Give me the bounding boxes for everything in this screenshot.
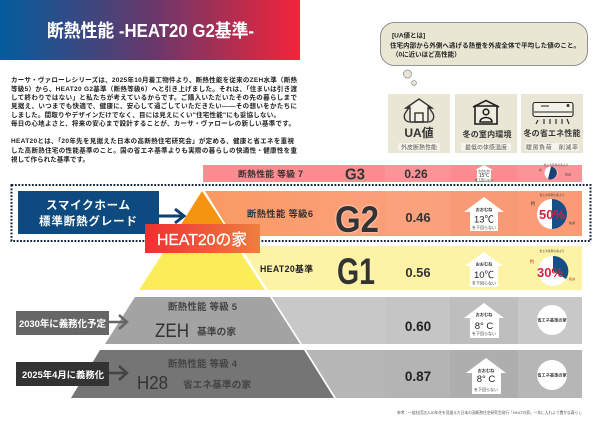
icon: house 15C: [475, 165, 493, 182]
icon: house 13C: [464, 197, 504, 231]
icon: house 13C: を下回らない: [472, 224, 496, 230]
chart: G1 reduction pie 30%: 削減: [569, 276, 575, 281]
icon: H28 energy standard circle: 省エネ基準の家: [537, 372, 567, 378]
icon: house 8C: おおむね: [476, 311, 493, 318]
intro text block: 等級5）から、HEAT20 G2基準（断熱等級6）へと引き上げました。それは、「住まいは引き渡: [11, 84, 298, 93]
row: grade 7 G3: G3: [345, 166, 365, 184]
pyramid: yellow G1 layer: [139, 253, 265, 290]
footer source note: 参考：一般社団法人20年先を見据えた日本の高断熱住宅研究会発行「HEATの家」一年に入れよう豊かな暮らし: [397, 410, 582, 415]
chart: G2 reduction pie 50%: 約: [531, 200, 536, 207]
callout: UA value speech bubble: [UA値とは]: [392, 30, 425, 40]
icon: house 8C: 8° C: [475, 321, 493, 332]
icon: house 15C: を下回らない: [475, 177, 493, 182]
arrow: 2025 to H28: [109, 366, 127, 380]
intro text block: しました。間取りやデザインだけでなく、目には見えにくい"住宅性能"にも妥協しない。: [11, 110, 280, 119]
callout: UA value speech bubble: 住宅内部から外側へ逃げる熱量を外皮全体で平均した値のこと。: [390, 40, 580, 50]
row: grade 6 G2: [205, 191, 582, 240]
chart: G3 reduction pie: 省エネ基準の家より: [543, 163, 569, 167]
icon: house 10C: おおむね: [476, 260, 493, 268]
icon: air conditioner: [533, 102, 573, 124]
row: G1 HEAT20 standard: 0.56: [405, 265, 431, 280]
row: grade 6 G2: 断熱性能 等級6: [247, 208, 313, 219]
icon: house 10C: [465, 252, 503, 287]
icon: house 8C second: おおむね: [478, 367, 495, 374]
row: grade 7 G3: 0.26: [404, 167, 428, 181]
chart: G2 reduction pie 50%: 50%: [539, 207, 565, 222]
label: mandatory April 2025: 2025年4月に義務化: [22, 369, 105, 380]
icon: house 13C: おおむね: [476, 206, 493, 213]
pyramid: grade 4 H28 layer: H28: [137, 373, 168, 393]
row: grade 6 G2: G2: [335, 199, 379, 240]
icon: house 15C: おおむね: [478, 168, 490, 173]
row: grade 5 ZEH right band: [272, 297, 582, 344]
arrow: standard grade to G2: [159, 209, 184, 223]
row: grade 7 G3: 断熱性能 等級 7: [238, 168, 303, 179]
icon: house 8C: [464, 303, 504, 338]
label: mandatory 2030: [16, 311, 109, 335]
chart: G1 reduction pie 30%: 約: [530, 258, 535, 265]
panel: winter energy-saving header: 冬の省エネ性能: [524, 128, 580, 138]
HEAT20 description text: 視して作られた基準です。: [11, 155, 89, 164]
panel: winter indoor environment header: [455, 94, 517, 153]
icon: person in house: [473, 100, 499, 124]
arrow: 2030 to ZEH: [109, 315, 127, 329]
label: Smile Home standard grade: スマイクホーム: [46, 199, 130, 212]
icon: ZEH energy standard circle: 省エネ基準の家: [537, 316, 567, 324]
pyramid: grade 4 H28 layer: [71, 350, 334, 398]
panel: winter indoor environment header: 最低の体感温度: [465, 144, 507, 152]
title banner: [0, 0, 300, 60]
icon: ZEH energy standard circle: [537, 305, 567, 335]
callout: UA value speech bubble: （0に近いほど高性能）: [392, 50, 461, 58]
pyramid: orange G2 tip: [180, 191, 225, 226]
label: mandatory 2030: 2030年に義務化予定: [19, 318, 106, 330]
label: Smile Home standard grade: 標準断熱グレード: [39, 214, 137, 228]
row: grade 4 H28 right band: [306, 350, 582, 398]
row: grade 4 H28 right band: 0.87: [405, 369, 431, 384]
callout: UA value speech bubble: [380, 22, 588, 85]
icon: house 8C second: を下回らない: [474, 386, 498, 392]
row: G1 HEAT20 standard: HEAT20基準: [260, 263, 313, 274]
intro text block: して終わりではない」と私たちが考えているからです。ご購入いただいたその先の暮らしまで: [11, 93, 298, 102]
intro text block: 毎日の心地よさと、将来の安心まで設計することが、カーサ・ヴァローレの新しい基準です。: [11, 119, 295, 128]
panel: UA value header: [388, 94, 450, 153]
pyramid: grade 5 ZEH layer: ZEH: [155, 321, 189, 342]
label: Smile Home standard grade: [18, 191, 159, 234]
HEAT20 description text: した高断熱住宅の性能基準のこと。国の省エネ基準よりも実際の暮らしの快適性・健康性を重: [11, 146, 298, 155]
HEAT20 description text: [11, 136, 298, 164]
panel: winter energy-saving header: [521, 94, 583, 153]
dotted highlight frame: [12, 185, 590, 241]
chart: G3 reduction pie: 削減: [565, 172, 571, 176]
icon: house 13C: 13℃: [474, 214, 495, 226]
icon: H28 energy standard circle: [537, 360, 567, 390]
pyramid: grade 5 ZEH layer: [105, 297, 300, 344]
chart: G1 reduction pie 30%: 30%: [537, 265, 563, 280]
icon: house: [404, 99, 434, 122]
intro text block: 見据え、いつまでも快適で、健康に、安心して過ごしていただきたい——その想いをかたちに: [11, 101, 297, 110]
icon: house 15C: 15℃: [479, 173, 489, 179]
HEAT20 description text: HEAT20とは、「20年先を見据えた日本の高断熱住宅研究会」が定める、健康と省エネを重視: [11, 136, 294, 145]
label: mandatory April 2025: [16, 362, 109, 386]
icon: house 8C second: [466, 358, 506, 394]
chart: G1 reduction pie 30%: 省エネ基準の家より: [539, 249, 565, 253]
row: grade 7 G3: [203, 163, 582, 184]
row: G1 HEAT20 standard: G1: [337, 251, 375, 292]
pyramid: grade 5 ZEH layer: 断熱性能 等級 5: [168, 301, 238, 313]
chart: G2 reduction pie 50%: [531, 193, 575, 229]
icon: house 8C: を下回らない: [472, 330, 496, 336]
panel: UA value header: UA値: [404, 125, 434, 140]
row: grade 6 G2: 0.46: [405, 210, 431, 225]
panel: winter energy-saving header: 暖房負荷 削減率: [526, 144, 578, 152]
panel: UA value header: 外皮断熱性能: [401, 144, 437, 152]
chart: G2 reduction pie 50%: 削減: [569, 220, 575, 225]
chart: G3 reduction pie: 約: [539, 167, 542, 172]
row: grade 6 G2: G2: [335, 199, 379, 240]
pyramid: grade 5 ZEH layer: 基準の家: [197, 325, 236, 338]
chart: G2 reduction pie 50%: 省エネ基準の家より: [539, 193, 565, 197]
row: G1 HEAT20 standard: [240, 246, 582, 292]
row: grade 5 ZEH right band: 0.60: [405, 319, 431, 334]
intro text block: カーサ・ヴァローレシリーズは、2025年10月着工物件より、断熱性能を従来のZEH水準（断熱: [11, 75, 298, 84]
intro text block: [11, 75, 298, 128]
pyramid: grade 4 H28 layer: 断熱性能 等級 4: [168, 358, 238, 370]
chart: G1 reduction pie 30%: [530, 249, 575, 286]
pyramid: grade 4 H28 layer: 省エネ基準の家: [183, 378, 251, 391]
icon: house 10C: を下回らない: [472, 280, 496, 286]
label: HEAT20 house: HEAT20の家: [157, 231, 247, 249]
icon: house 10C: 10℃: [474, 270, 495, 281]
panel: winter indoor environment header: 冬の室内環境: [462, 129, 512, 139]
title banner: 断熱性能 -HEAT20 G2基準-: [47, 20, 254, 41]
label: HEAT20 house: [145, 224, 260, 253]
chart: G3 reduction pie: [539, 163, 571, 180]
icon: house 8C second: 8° C: [477, 374, 495, 385]
